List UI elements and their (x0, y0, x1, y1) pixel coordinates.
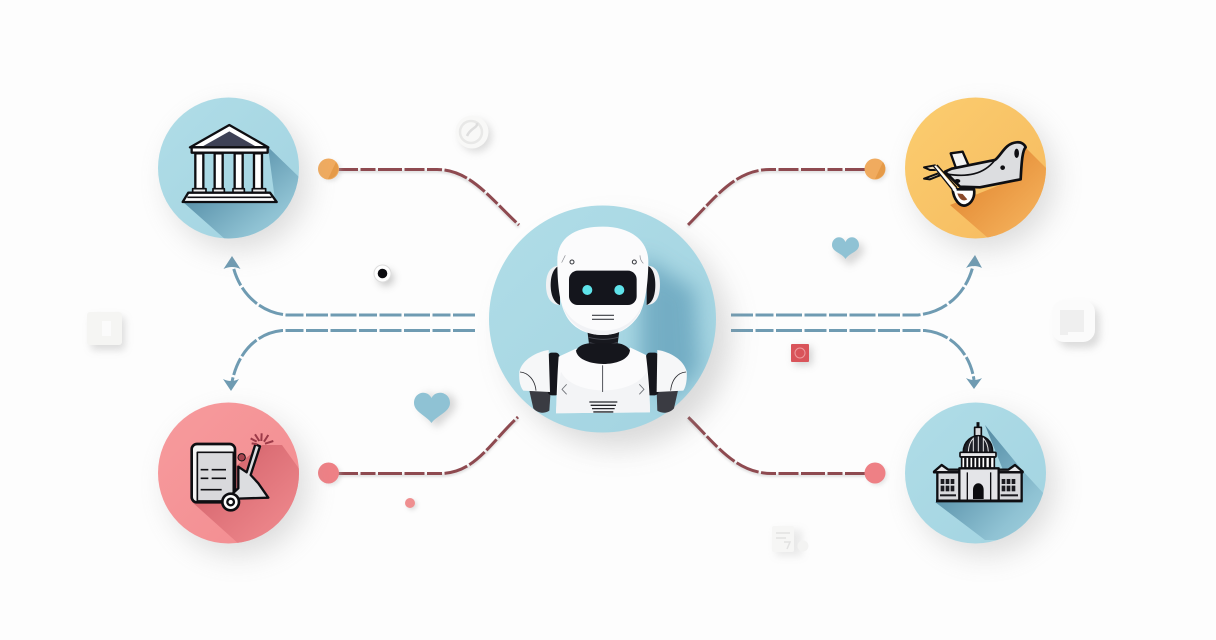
decoration: round badge top (456, 116, 492, 152)
icon: capitol (934, 422, 1023, 501)
robot head (557, 227, 648, 335)
panel: central robot disc (489, 206, 730, 448)
decoration: red square (791, 344, 812, 365)
arrow: robot to capitol (731, 330, 982, 389)
decoration: document bottom (772, 526, 808, 556)
robot torso (556, 343, 650, 413)
panel: bank disc (158, 98, 308, 250)
robot neck (587, 331, 619, 350)
arrow: robot to cart (223, 330, 475, 391)
decoration: square left (87, 312, 125, 350)
robot (519, 227, 687, 413)
panel: plane disc (905, 98, 1055, 250)
icon shadow: capitol (935, 425, 1045, 540)
arrow: robot to bank (224, 256, 475, 315)
connector: plane to robot (688, 170, 865, 227)
robot arms (519, 350, 687, 413)
connector: cart to robot (338, 417, 518, 476)
robot eyes (582, 285, 624, 295)
icon shadow: plane (950, 146, 1050, 240)
decoration: black dot (374, 265, 394, 286)
robot ears (546, 266, 660, 305)
icon: cart (192, 433, 273, 510)
connector: bank to robot (338, 170, 519, 227)
node: pink dot bottom right (864, 462, 887, 485)
icon: plane (924, 142, 1026, 206)
panel: capitol disc (905, 402, 1055, 555)
node: orange dot top right (864, 158, 887, 181)
decoration: blue heart right (832, 237, 864, 266)
decoration: rounded square right (1052, 300, 1100, 348)
node: orange dot top left (318, 158, 341, 181)
icon: bank (183, 125, 277, 202)
connector: capitol to robot (688, 417, 865, 476)
disc shadow behind robot (640, 255, 700, 400)
panel: cart disc (158, 402, 308, 555)
node: pink dot bottom left (318, 462, 341, 485)
decoration: pink dot (405, 498, 417, 510)
icon shadow: cart (192, 445, 300, 545)
icon shadow: bank (183, 147, 300, 240)
decoration: blue heart left (414, 393, 456, 428)
arrow: robot to plane (731, 255, 982, 315)
robot visor (569, 271, 637, 305)
